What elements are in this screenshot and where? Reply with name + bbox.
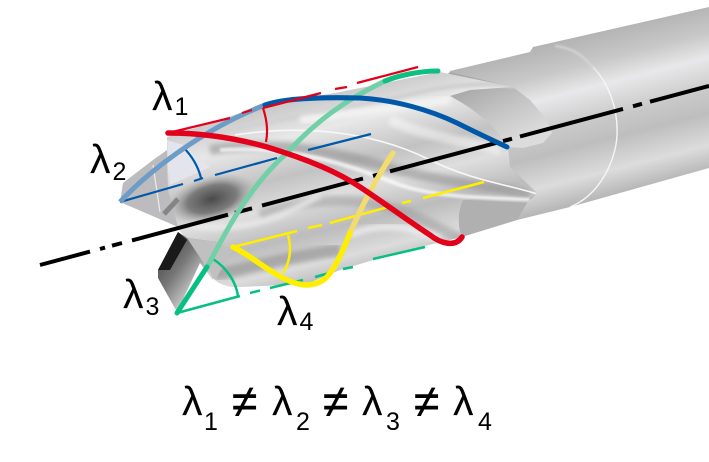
formula: lambda inequality: λ bbox=[362, 378, 383, 424]
collar bbox=[570, 67, 617, 207]
formula: lambda inequality: λ bbox=[272, 378, 293, 424]
lower flute pocket bbox=[459, 167, 537, 237]
formula: lambda inequality: ≠ bbox=[323, 375, 348, 427]
formula: lambda inequality: 3 bbox=[386, 408, 400, 436]
end mill tool bbox=[120, 7, 709, 312]
label: lambda 3: 3 bbox=[146, 293, 159, 321]
flute highlights bbox=[190, 84, 537, 275]
formula: lambda inequality bbox=[182, 375, 492, 436]
cutting body bbox=[167, 72, 537, 287]
formula: lambda inequality: ≠ bbox=[232, 375, 257, 427]
label: lambda 2: 2 bbox=[112, 158, 126, 186]
green helix lambda 3 bbox=[177, 71, 438, 313]
label: lambda 2: λ bbox=[90, 136, 111, 182]
label: lambda 1: λ bbox=[152, 73, 173, 119]
blue helix lambda 2 bbox=[120, 98, 507, 202]
label: lambda 3: λ bbox=[123, 271, 144, 317]
formula: lambda inequality: λ bbox=[453, 378, 474, 424]
formula: lambda inequality: 4 bbox=[478, 408, 492, 436]
formula: lambda inequality: λ bbox=[182, 378, 203, 424]
shank bbox=[440, 7, 709, 237]
yellow helix lambda 4 bbox=[233, 153, 484, 285]
lower tooth bbox=[158, 232, 217, 312]
collar rim highlight bbox=[555, 46, 597, 75]
label: lambda 1: 1 bbox=[174, 93, 188, 121]
label: lambda 4: λ bbox=[277, 288, 298, 334]
red helix lambda 1 bbox=[168, 67, 462, 243]
centre axis line bbox=[40, 86, 709, 265]
formula: lambda inequality: 1 bbox=[204, 408, 218, 436]
label: lambda 4: 4 bbox=[300, 308, 314, 336]
upper tip bbox=[120, 150, 178, 227]
upper flute pocket bbox=[420, 72, 552, 148]
shaded gullet bbox=[173, 176, 251, 222]
formula: lambda inequality: ≠ bbox=[414, 375, 439, 427]
formula: lambda inequality: 2 bbox=[296, 408, 310, 436]
